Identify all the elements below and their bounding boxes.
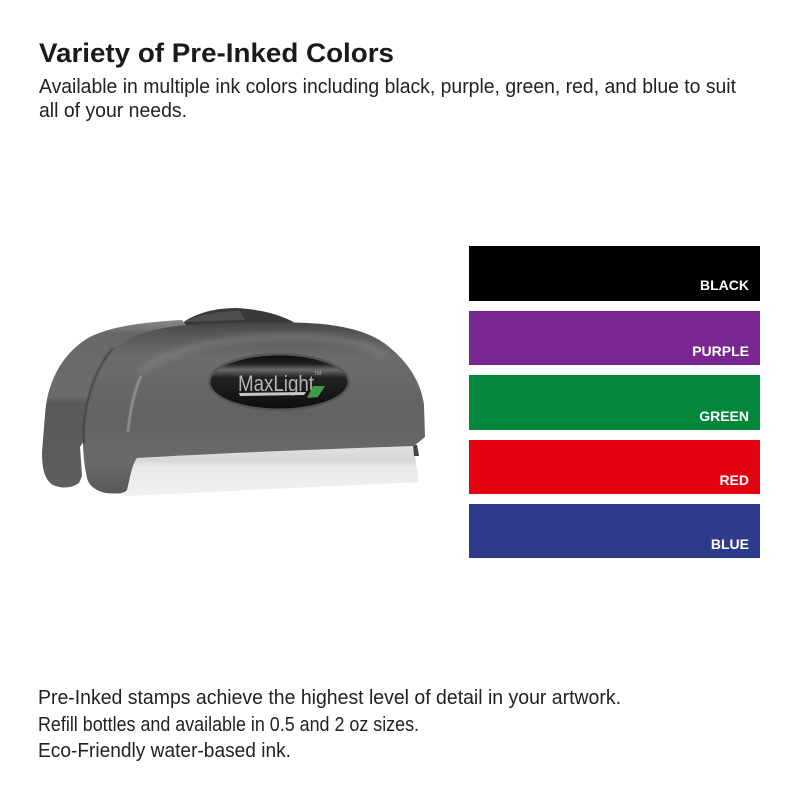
MaxLight logo oval: MaxLight — [238, 371, 314, 396]
stamp product illustration — [42, 308, 425, 496]
swatch: red: RED — [719, 472, 749, 488]
swatch: blue — [469, 504, 760, 558]
swatch: purple: PURPLE — [692, 343, 749, 359]
footer text: Refill bottles and available in 0.5 and 2 oz sizes. — [38, 714, 419, 736]
stamp ink pad — [110, 445, 419, 496]
swatch: blue: BLUE — [711, 536, 749, 552]
intro text — [39, 76, 736, 122]
intro text: all of your needs. — [39, 100, 187, 122]
footer text: Pre-Inked stamps achieve the highest level of detail in your artwork. — [38, 687, 621, 709]
swatch: black — [469, 246, 760, 301]
stamp rear shell — [42, 320, 190, 487]
swatch: green — [469, 375, 760, 430]
MaxLight logo oval: TM — [314, 371, 321, 377]
color swatches — [469, 246, 760, 558]
stamp top button — [179, 308, 295, 332]
swatch: purple — [469, 311, 760, 365]
swatch: red — [469, 440, 760, 494]
intro text: Available in multiple ink colors including black, purple, green, red, and blue to suit — [39, 76, 736, 98]
swatch: green: GREEN — [699, 408, 749, 424]
MaxLight logo oval — [208, 353, 350, 411]
title: Variety of Pre-Inked Colors — [39, 38, 394, 68]
stamp front shell — [83, 322, 425, 494]
footer text: Eco-Friendly water-based ink. — [38, 740, 291, 762]
swatch: black: BLACK — [700, 277, 749, 293]
footer text — [38, 687, 621, 762]
